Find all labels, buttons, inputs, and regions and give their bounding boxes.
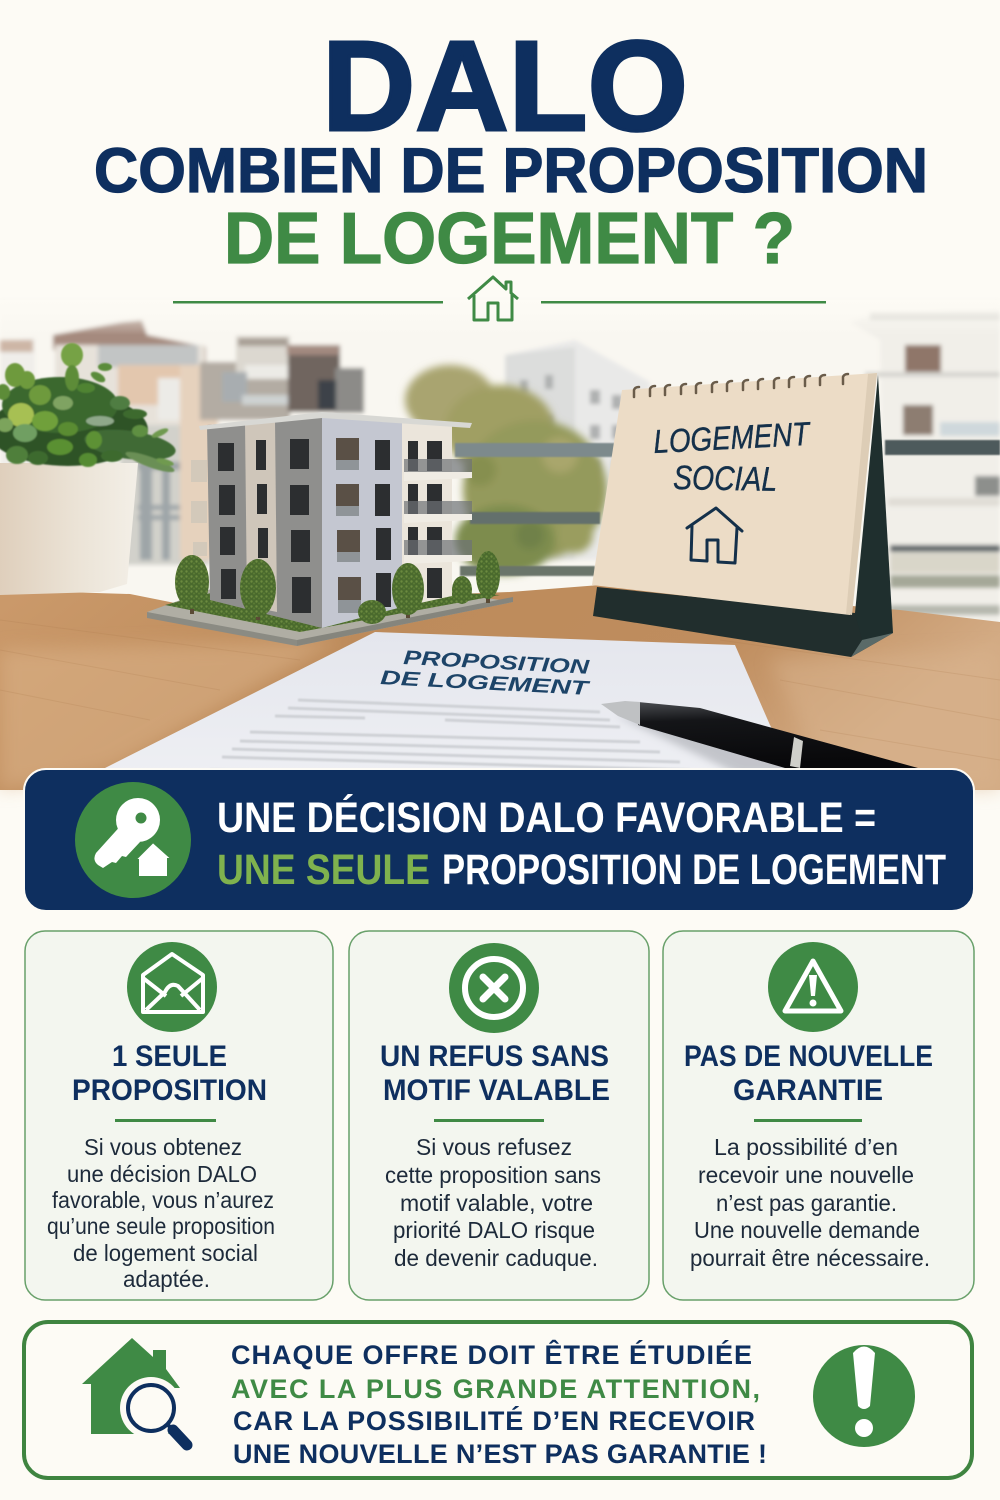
- wood highlight: [0, 640, 340, 790]
- balcony railings: [455, 440, 1000, 576]
- card title: GARANTIE: [733, 1074, 883, 1107]
- panel: pas de nouvelle garantie: [663, 931, 974, 1300]
- card title: [684, 1040, 933, 1107]
- card body: [47, 1134, 275, 1292]
- banner line 2: UNE SEULE: [217, 846, 430, 894]
- card title: UN REFUS SANS: [380, 1040, 609, 1073]
- calendar text: [652, 415, 813, 499]
- callout text: CAR LA POSSIBILITÉ D’EN RECEVOIR: [233, 1405, 755, 1436]
- sheet of paper: proposition de logement: PROPOSITION: [403, 647, 590, 679]
- card body: [690, 1134, 930, 1271]
- sheet of paper: proposition de logement: DE LOGEMENT: [380, 667, 591, 700]
- panel: un refus sans motif valable: [349, 931, 649, 1300]
- card title: PAS DE NOUVELLE: [684, 1040, 933, 1073]
- callout text: [231, 1339, 767, 1469]
- card body: n’est pas garantie.: [716, 1190, 897, 1216]
- calendar text: LOGEMENT: [652, 415, 813, 460]
- icon: cross in circle: [449, 943, 539, 1033]
- title: [94, 15, 928, 279]
- sheet of paper: proposition de logement: [85, 632, 805, 790]
- card body: favorable, vous n’aurez: [52, 1187, 274, 1213]
- callout: bottom warning: [24, 1322, 972, 1478]
- icon: house with magnifying glass: [82, 1338, 187, 1445]
- card body: Si vous refusez: [416, 1134, 572, 1160]
- windows: [218, 439, 442, 613]
- card body: pourrait être nécessaire.: [690, 1245, 930, 1271]
- icon: calendar house: [687, 508, 742, 563]
- card title: 1 SEULE: [112, 1040, 227, 1073]
- card title: PROPOSITION: [72, 1074, 267, 1107]
- model trees: [175, 551, 500, 624]
- card title: [380, 1040, 610, 1107]
- card body: motif valable, votre: [400, 1190, 593, 1216]
- panel: 1 seule proposition: [25, 931, 333, 1300]
- small side balconies: [191, 460, 207, 556]
- card body: qu’une seule proposition: [47, 1213, 275, 1239]
- card body: une décision DALO: [67, 1161, 257, 1187]
- model apartment building: [147, 412, 513, 646]
- title: COMBIEN DE PROPOSITION: [94, 136, 928, 206]
- paper lines: [210, 700, 700, 780]
- callout text: AVEC LA PLUS GRANDE ATTENTION,: [231, 1374, 760, 1404]
- card title: [72, 1040, 267, 1107]
- photo: model building, calendar and housing offer on a table: [0, 300, 1000, 790]
- card body: recevoir une nouvelle: [698, 1162, 914, 1188]
- balconies: [404, 472, 472, 564]
- icon: potted plant: [0, 343, 178, 595]
- title: DE LOGEMENT ?: [224, 199, 795, 279]
- card title: MOTIF VALABLE: [383, 1074, 610, 1107]
- table top: [0, 585, 1000, 790]
- card body: Si vous obtenez: [84, 1134, 242, 1160]
- blurred tree behind the balcony: [405, 365, 607, 575]
- icon: warning triangle: [768, 942, 858, 1032]
- card body: de logement social: [73, 1240, 258, 1266]
- divider with house icon: [173, 277, 826, 320]
- title: DALO: [322, 15, 688, 158]
- card body: Une nouvelle demande: [694, 1217, 920, 1243]
- pen: [601, 701, 918, 775]
- card body: de devenir caduque.: [394, 1245, 598, 1271]
- banner: key message: [24, 769, 974, 911]
- card body: La possibilité d’en: [714, 1134, 898, 1160]
- wood grain: [0, 620, 1000, 760]
- card body: adaptée.: [123, 1266, 210, 1292]
- banner line 1: UNE DÉCISION DALO FAVORABLE =: [217, 794, 876, 842]
- desk calendar: logement social: [592, 373, 893, 657]
- icon: key and house: [75, 782, 191, 898]
- banner line 2: [217, 846, 946, 894]
- windows on the light facade: [336, 438, 361, 613]
- icon: exclamation mark: [813, 1345, 915, 1447]
- callout text: UNE NOUVELLE N’EST PAS GARANTIE !: [233, 1439, 767, 1469]
- calendar rings: [634, 374, 848, 397]
- card body: priorité DALO risque: [393, 1217, 595, 1243]
- calendar text: SOCIAL: [673, 459, 778, 499]
- card body: [385, 1134, 601, 1271]
- icon: open envelope: [127, 942, 217, 1032]
- callout text: CHAQUE OFFRE DOIT ÊTRE ÉTUDIÉE: [231, 1339, 752, 1370]
- card body: cette proposition sans: [385, 1162, 601, 1188]
- blurred city background: [0, 300, 1000, 630]
